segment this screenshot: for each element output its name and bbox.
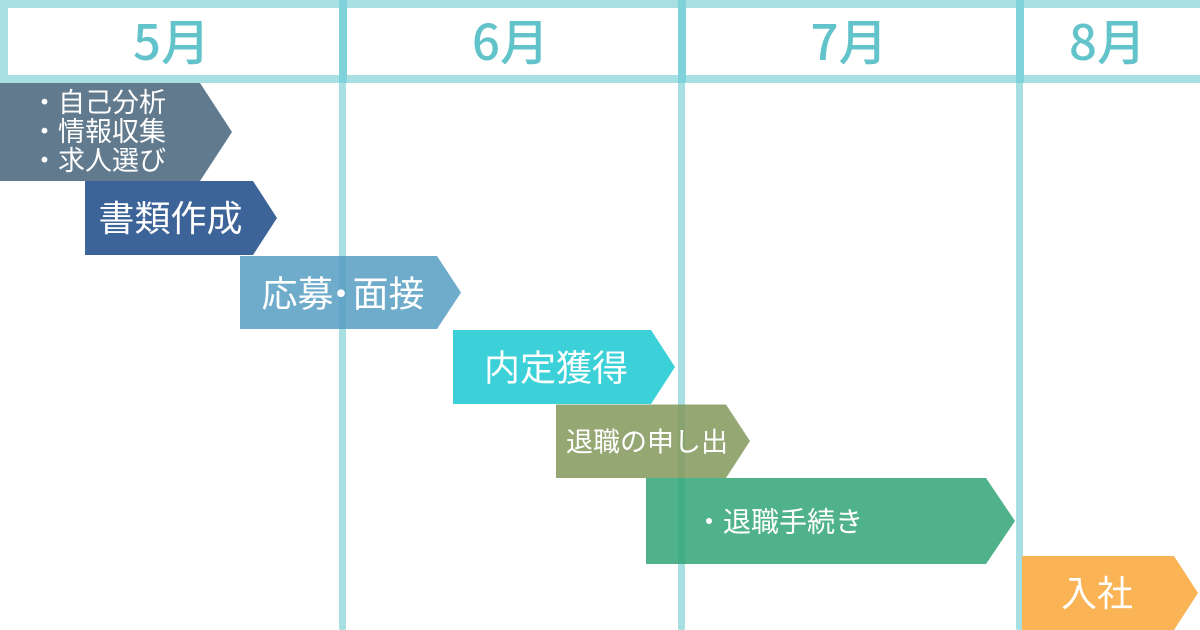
- arrow: application and interview: 応募: [262, 266, 334, 318]
- arrow: document preparation: [85, 181, 277, 255]
- arrow: document preparation: 書類作成: [98, 190, 243, 242]
- arrow: joining the company: 入社: [1061, 565, 1133, 617]
- August label: 8月: [1069, 4, 1146, 75]
- arrow: job offer: [453, 330, 675, 404]
- arrow: application and interview: [240, 256, 461, 329]
- month grid lines: [339, 0, 1023, 630]
- arrow: self analysis, research, job selection: ・情報収集: [31, 110, 166, 149]
- arrow: self analysis, research, job selection: ・自己分析: [31, 81, 166, 120]
- June label: 6月: [472, 4, 549, 75]
- arrow: self analysis, research, job selection: [0, 81, 232, 181]
- month labels: [133, 4, 1146, 75]
- July label: 7月: [811, 4, 887, 75]
- arrow: joining the company: [1022, 556, 1198, 630]
- arrow: resignation procedures: ・退職手続き: [695, 500, 863, 540]
- month header frame: [0, 0, 1200, 83]
- arrow: resignation notice: [556, 404, 750, 478]
- May label: 5月: [133, 4, 210, 75]
- arrow: resignation notice: 退職の申し出: [566, 420, 728, 460]
- arrow: application and interview: 面接: [352, 266, 425, 318]
- arrow: self analysis, research, job selection: ・求人選び: [31, 139, 166, 178]
- arrow: job offer: 内定獲得: [484, 340, 628, 392]
- arrow: resignation procedures: [646, 478, 1015, 564]
- arrow: application and interview: ・: [323, 266, 359, 318]
